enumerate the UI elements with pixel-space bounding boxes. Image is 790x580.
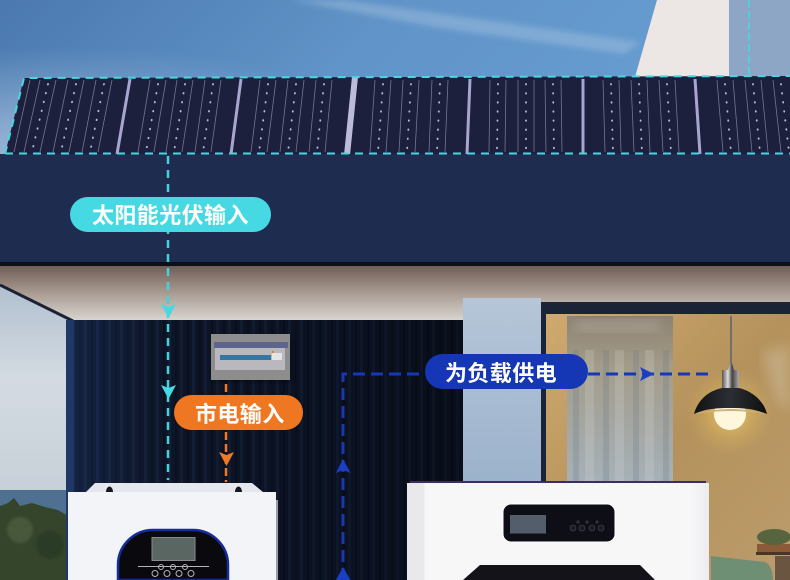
solar input dashed line (161, 156, 176, 480)
lamp glow (686, 368, 774, 456)
mains arrow (219, 452, 234, 466)
load arrow up lower (336, 567, 350, 580)
wall reflection (762, 345, 790, 410)
floor and furniture shadow (775, 556, 790, 580)
bushes (0, 498, 68, 580)
label: mains input (174, 395, 303, 430)
sky haze (0, 46, 400, 266)
lamp socket (722, 363, 739, 388)
wide centre seam (347, 77, 355, 155)
solar panel array (5, 76, 790, 155)
label: solar PV input (70, 197, 271, 232)
inverter screen (152, 538, 195, 560)
sky background (0, 0, 790, 156)
curtain (567, 316, 673, 484)
solar arrow upper (161, 304, 176, 318)
inverter control panel (118, 530, 228, 580)
electrical distribution box (211, 334, 290, 380)
lamp shade (694, 388, 767, 414)
panel dashed outline (5, 76, 790, 154)
sea (0, 490, 70, 515)
potted plant (756, 529, 790, 555)
label: supply to load (425, 354, 588, 389)
inverter body (68, 492, 276, 580)
label: mains input: 市电输入 (195, 402, 285, 427)
contrail cloud (290, 0, 640, 54)
light blue pillar (463, 298, 541, 580)
left view of sky (0, 266, 70, 491)
label: solar PV input: 太阳能光伏输入 (92, 203, 249, 228)
green chair (711, 556, 773, 580)
battery control panel (503, 504, 615, 542)
window interior (546, 314, 790, 580)
soffit ceiling (0, 266, 790, 320)
top right cyan dashed line (748, 0, 750, 76)
panel thin grid lines (14, 80, 781, 152)
wall shading (66, 320, 463, 580)
grey-blue building side (729, 0, 790, 78)
load arrow right (640, 367, 654, 381)
label: supply to load: 为负载供电 (445, 361, 557, 386)
inverter buttons (138, 564, 209, 576)
wall left edge (66, 320, 74, 580)
window frame (541, 302, 790, 580)
battery screen (510, 515, 546, 534)
mains input dashed line (219, 384, 234, 482)
battery buttons (570, 521, 604, 531)
lamp shade underside (694, 409, 767, 414)
load supply dashed line (336, 367, 708, 580)
dark ribbed wall (66, 320, 463, 580)
soffit edge beam (0, 285, 73, 321)
roof shadow line (0, 262, 790, 266)
inverter top flange (86, 483, 263, 492)
roof fascia (0, 154, 790, 263)
pendant lamp (686, 316, 774, 456)
battery lower dark panel (463, 565, 655, 580)
panel solder dots (32, 84, 789, 152)
inverter mounting holes (106, 487, 242, 492)
battery body (407, 483, 709, 580)
lamp cord (730, 316, 732, 368)
battery (407, 481, 709, 580)
lamp bulb (714, 398, 746, 430)
inverter (68, 483, 278, 580)
load arrow up upper (336, 459, 350, 473)
panel bright seams (117, 79, 700, 154)
distant white building (635, 0, 729, 77)
solar arrow lower (161, 385, 176, 399)
